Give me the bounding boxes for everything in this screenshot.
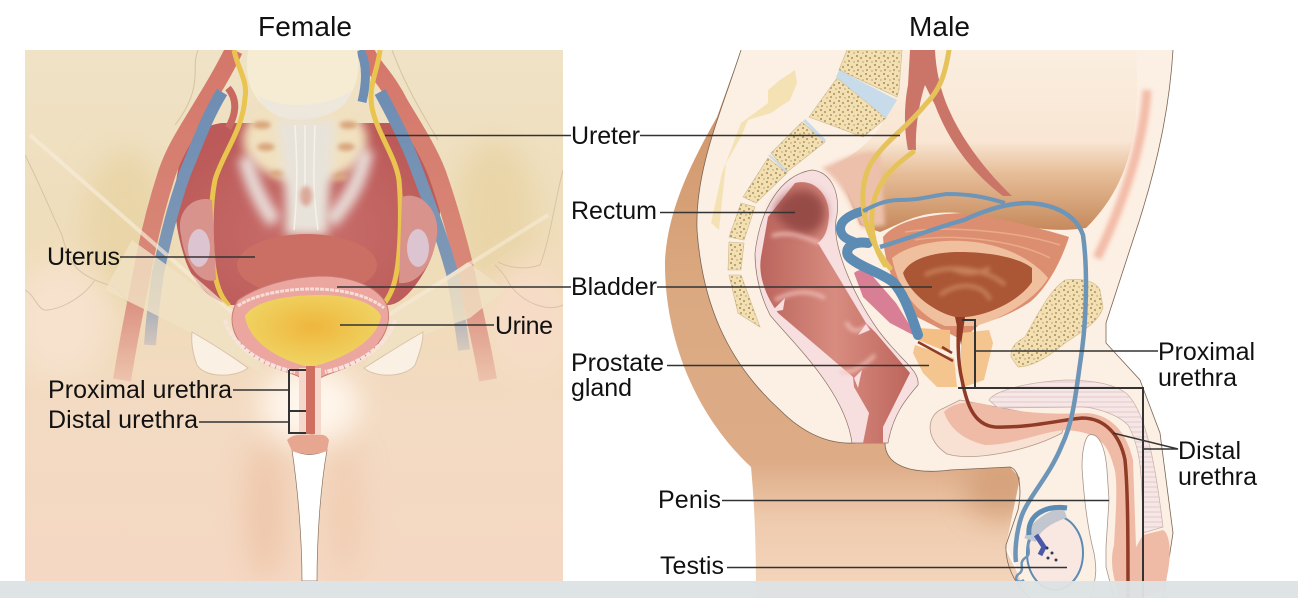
label: Bladder: Bladder xyxy=(571,273,657,301)
sacrum xyxy=(247,50,358,105)
ligaments xyxy=(276,120,336,235)
corpus spongiosum xyxy=(944,402,1170,598)
labels: female leader lines xyxy=(120,136,571,433)
bladder wall xyxy=(232,276,389,378)
label: Rectum: Rectum xyxy=(571,197,657,225)
hip shading xyxy=(10,50,575,580)
rectum shade and folds xyxy=(771,190,875,388)
long blue duct xyxy=(863,194,1005,211)
rectum wall xyxy=(755,170,918,443)
prostate xyxy=(913,328,993,388)
thigh shading xyxy=(965,460,1035,520)
label: Proximal urethra (male): Proximal xyxy=(1158,338,1255,366)
urethra xyxy=(955,317,965,345)
panel: female anatomy illustration xyxy=(10,50,575,581)
label: Penis: Penis xyxy=(658,486,721,514)
sacrum vertebrae xyxy=(728,50,902,327)
rectum xyxy=(760,182,910,443)
label: Proximal urethra (male): urethra xyxy=(1158,364,1237,392)
label: Distal urethra (male): urethra xyxy=(1178,463,1257,491)
label: Prostate gland: gland xyxy=(571,374,632,402)
bottom bar xyxy=(0,581,1298,598)
label: Testis: Testis xyxy=(660,552,724,580)
left ureter xyxy=(211,50,246,306)
coil xyxy=(1016,540,1030,582)
mottled fascia xyxy=(245,150,366,222)
corpus cavernosum xyxy=(989,380,1163,533)
fat strip xyxy=(711,70,797,230)
pubic bone xyxy=(1011,279,1103,367)
testis xyxy=(1027,507,1083,590)
panel: male anatomy illustration xyxy=(665,50,1173,598)
vulva xyxy=(287,434,329,454)
label: Distal urethra (female): Distal urethra xyxy=(48,406,198,434)
artery xyxy=(905,50,1012,196)
ureters xyxy=(863,50,949,268)
vaginal gap xyxy=(292,450,327,581)
labels: male leader lines xyxy=(640,136,1178,598)
label: Distal urethra (male): Distal xyxy=(1178,437,1241,465)
pubic rami xyxy=(30,135,548,378)
ejaculatory ducts xyxy=(918,342,953,361)
uterus xyxy=(237,234,377,288)
urethra xyxy=(299,366,321,434)
label: Urine: Urine xyxy=(495,312,553,340)
body outline xyxy=(697,50,1173,598)
pelvic cavity xyxy=(175,123,440,305)
obturator foramina xyxy=(192,332,423,375)
peritoneal cavity xyxy=(840,86,1137,232)
white gap between scrotum and penis xyxy=(1082,435,1114,598)
title: Male: Male xyxy=(909,11,970,42)
seminal vesicle xyxy=(854,270,917,337)
pale sacral backdrop xyxy=(236,123,374,186)
body interior xyxy=(697,50,1173,598)
vas deferens clump xyxy=(840,211,918,335)
urine xyxy=(245,295,381,366)
ovaries xyxy=(180,196,437,283)
peritoneum pink fold xyxy=(822,152,885,228)
label: Ureter: Ureter xyxy=(571,122,640,150)
label: Prostate gland: Prostate xyxy=(571,349,664,377)
bladder xyxy=(883,213,1069,340)
buttock and thigh xyxy=(665,50,1030,598)
title: Female: Female xyxy=(258,11,352,42)
right artery and vein xyxy=(360,50,488,380)
right ureter xyxy=(371,50,400,304)
corpus bulb xyxy=(930,400,1065,457)
label: Proximal urethra (female): Proximal urethra xyxy=(48,376,232,404)
label: Uterus: Uterus xyxy=(47,243,120,271)
abdominal muscle xyxy=(1097,90,1147,258)
sacral foramina xyxy=(253,121,357,181)
left artery and vein xyxy=(122,50,235,380)
